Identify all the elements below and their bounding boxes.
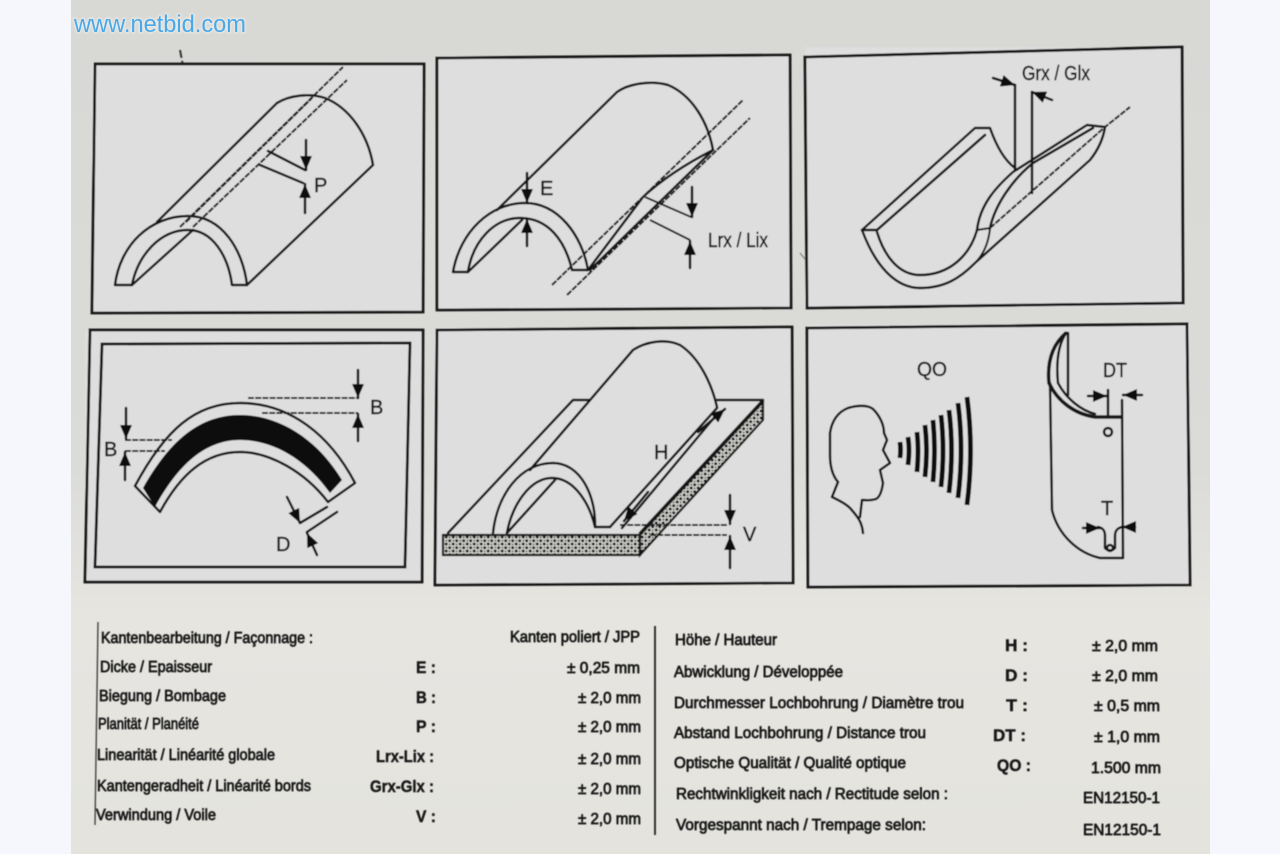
arrows: Grx / Glx dimension bbox=[993, 63, 1090, 193]
table: left column values: ± 2,0 mm bbox=[578, 751, 641, 768]
panel: bow B and developed D bbox=[85, 330, 423, 583]
panel: edge straightness Grx / Glx bbox=[805, 47, 1183, 308]
table: left column labels: Planität / Planéité bbox=[98, 716, 199, 733]
icon: bent black glass profile bbox=[135, 403, 355, 512]
table: right column labels: Abwicklung / Développée bbox=[674, 664, 843, 681]
table: right column symbols bbox=[993, 636, 1031, 775]
icon: vision wedge bbox=[900, 397, 970, 505]
scratch marks bbox=[101, 50, 820, 551]
table: right column values: ± 2,0 mm bbox=[1092, 638, 1158, 655]
table: left column labels: Kantengeradheit / Linéarité bords bbox=[97, 778, 311, 795]
arrows: E dimension: E bbox=[540, 178, 553, 200]
arrows: B dimension right bbox=[248, 370, 383, 441]
table: right column values: ± 1,0 mm bbox=[1094, 729, 1160, 746]
arrows: B dimension right: B bbox=[370, 397, 383, 419]
table: right column labels: Optische Qualität / Qualité optique bbox=[674, 755, 906, 772]
table: left column labels bbox=[96, 630, 313, 824]
table: left column values: ± 0,25 mm bbox=[567, 660, 640, 677]
table: right column values: 1.500 mm bbox=[1091, 760, 1161, 777]
table: left column symbols: B : bbox=[416, 688, 436, 707]
arrows: D dimension: D bbox=[276, 534, 290, 556]
arrows: B dimension left: B bbox=[104, 439, 117, 461]
table: right column values: EN12150-1 bbox=[1083, 790, 1160, 807]
table: left column labels: Linearität / Linéarité globale bbox=[97, 747, 275, 764]
table: left column labels: Biegung / Bombage bbox=[99, 688, 226, 705]
watermark: www.netbid.com bbox=[73, 11, 246, 38]
table: right column values: ± 2,0 mm bbox=[1092, 668, 1158, 685]
table: left column values: ± 2,0 mm bbox=[578, 811, 641, 828]
table: left column symbols: Grx-Glx : bbox=[370, 777, 434, 796]
icon: inverted curved glass bbox=[862, 107, 1130, 288]
table: left column values bbox=[510, 629, 641, 828]
table: left column symbols bbox=[370, 658, 436, 826]
arrows: B dimension left bbox=[104, 408, 172, 480]
table: right column symbols: H : bbox=[1005, 636, 1028, 655]
arrows: DT dimension bbox=[1088, 360, 1142, 396]
table: right column symbols: DT : bbox=[993, 726, 1026, 745]
panel: optical quality QO, DT, T bbox=[807, 324, 1190, 587]
table: right column symbols: QO : bbox=[997, 756, 1031, 775]
arrows: P dimension bbox=[260, 140, 327, 213]
table: right column labels: Höhe / Hauteur bbox=[675, 632, 778, 649]
icon: human head profile bbox=[830, 406, 890, 533]
icon: glass with holes bbox=[1049, 333, 1123, 558]
table: right column labels: Durchmesser Lochbohrung / Diamètre trou bbox=[674, 695, 964, 712]
arrows: T dimension: T bbox=[1101, 498, 1113, 520]
table: right column labels: Rechtwinkligkeit nach / Rectitude selon : bbox=[676, 786, 948, 803]
column rule bbox=[95, 622, 655, 835]
table: left column labels: Verwindung / Voile bbox=[96, 807, 216, 824]
table: left column values: ± 2,0 mm bbox=[578, 781, 641, 798]
arrows: E dimension bbox=[527, 173, 553, 246]
table: left column symbols: E : bbox=[416, 658, 436, 677]
icon: glass on flat table bbox=[443, 341, 763, 555]
arrows: Grx / Glx dimension: Grx / Glx bbox=[1022, 63, 1090, 85]
arrows: D dimension bbox=[276, 497, 337, 556]
table: left column values: ± 2,0 mm bbox=[578, 690, 641, 707]
arrows: Lrx / Lix dimension bbox=[645, 187, 768, 268]
table: right column symbols: T : bbox=[1006, 696, 1028, 715]
watermark: www.netbid.com bbox=[73, 11, 246, 38]
table: left column symbols: V : bbox=[416, 807, 436, 826]
icon: curved glass with planarity lines bbox=[115, 67, 373, 285]
table: right column values bbox=[1083, 638, 1161, 839]
table: left column labels: Kantenbearbeitung / Façonnage : bbox=[101, 630, 313, 647]
arrows: P dimension: P bbox=[314, 175, 327, 197]
panel: height H and twist V bbox=[435, 327, 793, 585]
icon: curved glass with linearity lines bbox=[453, 83, 750, 295]
table: left column symbols: Lrx-Lix : bbox=[376, 747, 434, 766]
arrows: H dimension bbox=[624, 409, 725, 521]
arrows: V dimension bbox=[620, 495, 757, 568]
label: QO: QO bbox=[917, 359, 947, 381]
table: right column labels: Vorgespannt nach / Trempage selon: bbox=[676, 817, 926, 834]
table: right column labels: Abstand Lochbohrung / Distance trou bbox=[674, 725, 926, 742]
table: right column symbols: D : bbox=[1005, 666, 1028, 685]
table: left column values: ± 2,0 mm bbox=[578, 719, 641, 736]
table: right column labels bbox=[674, 632, 964, 834]
panel: planarity P bbox=[92, 63, 424, 313]
arrows: V dimension: V bbox=[743, 524, 757, 546]
arrows: H dimension: H bbox=[654, 442, 668, 464]
arrows: Lrx / Lix dimension: Lrx / Lix bbox=[708, 230, 768, 252]
arrows: DT dimension: DT bbox=[1103, 360, 1127, 382]
table: right column values: ± 0,5 mm bbox=[1094, 698, 1160, 715]
table: left column labels: Dicke / Epaisseur bbox=[100, 659, 213, 676]
arrows: T dimension bbox=[1083, 498, 1135, 528]
table: left column symbols: P : bbox=[416, 717, 436, 736]
panel: thickness E and linearity bbox=[437, 55, 791, 310]
table: left column values: Kanten poliert / JPP bbox=[510, 629, 640, 646]
table: right column values: EN12150-1 bbox=[1083, 822, 1161, 839]
